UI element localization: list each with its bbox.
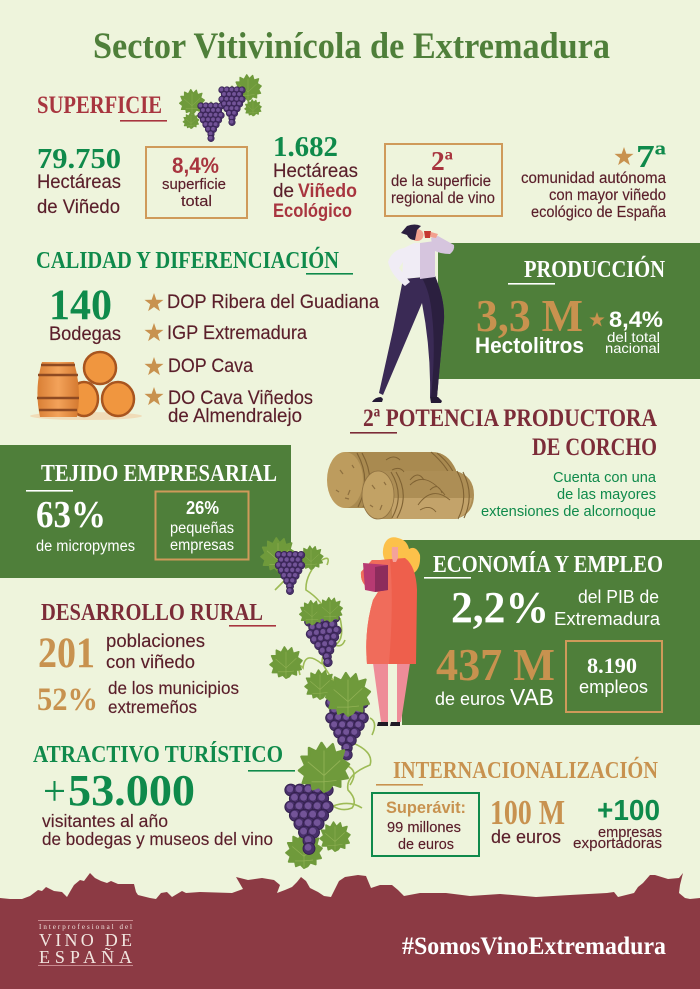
panel: producción background (438, 243, 700, 379)
list: denominaciones de origen: DOP Cava (168, 356, 253, 377)
stat: +53.000 visitantes: de bodegas y museos del vino (42, 829, 273, 849)
panel: producción text (475, 256, 666, 358)
illustration: grapevine (261, 538, 375, 868)
panel: internacionalización (372, 757, 662, 856)
logo: interprofesional del vino de España: VINO DE (39, 930, 132, 950)
icon: star (589, 312, 605, 326)
stat: 1.682 hectáreas ecológico: 1.682 (273, 131, 338, 163)
callout: 2ª superficie regional: regional de vino (391, 190, 495, 207)
heading: atractivo turístico: ATRACTIVO TURÍSTICO (33, 742, 283, 768)
callout: 8.190 empleos: 8.190 (587, 653, 637, 678)
stat: 7ª comunidad autónoma: comunidad autónoma (521, 170, 666, 187)
stat: 1.682 hectáreas ecológico: Viñedo (298, 181, 357, 202)
logo: interprofesional del vino de España (38, 920, 133, 967)
list: denominaciones de origen: IGP Extremadura (167, 323, 307, 344)
stat: 201 poblaciones: 201 (38, 630, 95, 677)
stat: 52% municipios: 52% (37, 682, 98, 718)
stat: 1.682 hectáreas ecológico: de (273, 181, 294, 202)
list: denominaciones de origen (144, 292, 379, 427)
stat: +53.000 visitantes (42, 766, 273, 849)
stat: 140 bodegas: 140 (49, 282, 112, 329)
list: denominaciones de origen: DO Cava Viñedos (168, 388, 313, 409)
stat: 1.682 hectáreas ecológico (273, 131, 358, 222)
heading: 2ª potencia productora de corcho: 2ª POTENCIA PRODUCTORA (363, 405, 657, 432)
stat: +53.000 visitantes: 53.000 (68, 766, 195, 815)
callout: superávit 99 millones (372, 793, 479, 856)
stat: 201 poblaciones: poblaciones (106, 631, 205, 651)
list: denominaciones de origen: de Almendralejo (168, 406, 302, 427)
stat: 437 M de euros VAB (435, 639, 555, 710)
callout: 26% pequeñas empresas: pequeñas (170, 520, 234, 537)
heading: superficie: SUPERFICIE (37, 92, 162, 119)
callout: 8,4% superficie total (146, 147, 247, 218)
vine leaf (270, 647, 302, 678)
stat: 1.682 hectáreas ecológico: Ecológico (273, 201, 352, 222)
heading: producción: PRODUCCIÓN (524, 256, 666, 283)
panel: desarrollo rural (37, 600, 276, 718)
panel: superficie (37, 75, 666, 222)
heading: desarrollo rural: DESARROLLO RURAL (41, 600, 263, 626)
panel: tejido empresarial background (0, 445, 291, 578)
grape cluster 3 (305, 670, 370, 760)
heading: 2ª potencia productora de corcho: DE CORCHO (532, 434, 657, 461)
stat: 201 poblaciones: con viñedo (106, 652, 195, 672)
stat: 79.750 hectáreas: de Viñedo (37, 197, 120, 218)
icon: grapes (180, 75, 261, 142)
callout: 8,4% superficie total: total (181, 193, 212, 210)
hashtag: #SomosVinoExtremadura (402, 933, 666, 960)
callout: 2ª superficie regional: 2ª (431, 146, 453, 176)
stat: 437 M de euros VAB: de euros (435, 689, 505, 709)
icon: barrels (30, 352, 142, 420)
text: extensiones de alcornoque: Cuenta con una (553, 469, 657, 486)
stat: 63% de micropymes: de micropymes (36, 538, 135, 555)
callout: 2ª superficie regional (385, 144, 502, 216)
stat: +100 empresas exportadoras: exportadoras (573, 835, 662, 852)
stat: 2,2% del PIB: Extremadura (554, 609, 661, 629)
heading: calidad y diferenciación: CALIDAD Y DIFERENCIACIÓN (36, 247, 340, 274)
heading: tejido empresarial: TEJIDO EMPRESARIAL (41, 461, 277, 487)
stat: 437 M de euros VAB: 437 M (436, 639, 555, 690)
stat: 8,4% del total nacional: del total (607, 329, 660, 345)
stat: 3,3 M hectolitros: 3,3 M (476, 290, 583, 341)
stat: 52% municipios: de los municipios (108, 678, 239, 698)
stat: 201 poblaciones (38, 630, 205, 677)
callout: 2ª superficie regional: de la superficie (391, 173, 491, 190)
logo: interprofesional del vino de España: ESPAÑA (39, 946, 132, 967)
stat: 8,4% del total nacional (605, 307, 663, 356)
stat: 100 M de euros: de euros (491, 827, 561, 847)
stat: 52% municipios (37, 678, 239, 718)
callout: 26% pequeñas empresas: empresas (170, 537, 234, 554)
stat: +53.000 visitantes: + (43, 769, 66, 815)
callout: superávit 99 millones: de euros (398, 836, 454, 853)
stat: 8,4% del total nacional: 8,4% (609, 307, 663, 332)
stat: 2,2% del PIB: 2,2% (451, 583, 549, 632)
stat: 63% de micropymes (36, 494, 135, 555)
list: denominaciones de origen: DOP Ribera del Guadiana (167, 292, 379, 313)
callout: 26% pequeñas empresas: 26% (186, 498, 219, 518)
stat: 7ª comunidad autónoma: 7ª (636, 138, 666, 174)
stat: 140 bodegas: Bodegas (49, 324, 121, 345)
grape cluster 4 (285, 743, 350, 868)
text: extensiones de alcornoque: extensiones de alcornoque (481, 503, 656, 520)
stat: 52% municipios: extremeños (108, 697, 197, 717)
panel: tejido empresarial text (26, 461, 277, 560)
grape cluster 1 (261, 538, 323, 595)
text: extensiones de alcornoque (481, 469, 657, 520)
callout: 26% pequeñas empresas (156, 492, 248, 560)
stat: +53.000 visitantes: visitantes al año (42, 811, 168, 831)
stat: 79.750 hectáreas (37, 144, 121, 218)
stat: +100 empresas exportadoras: +100 (597, 795, 660, 827)
callout: 8,4% superficie total: superficie (162, 176, 226, 193)
logo: interprofesional del vino de España: Interprofesional del (39, 923, 132, 931)
callout: 8.190 empleos (566, 641, 662, 712)
footer band with vine silhouette (0, 873, 700, 989)
stat: 79.750 hectáreas: 79.750 (37, 144, 121, 175)
stat: 100 M de euros (490, 793, 565, 847)
heading: economía y empleo: ECONOMÍA Y EMPLEO (433, 552, 663, 578)
callout: superávit 99 millones: Superávit: (386, 798, 466, 817)
stat: 2,2% del PIB: del PIB de (578, 587, 659, 607)
stat: 63% de micropymes: 63% (36, 494, 106, 536)
figure: woman reading (361, 537, 420, 726)
stat: 7ª comunidad autónoma (521, 138, 666, 221)
stat: +100 empresas exportadoras (573, 795, 662, 852)
text: extensiones de alcornoque: de las mayores (557, 486, 656, 503)
title: Sector Vitivinícola de Extremadura (93, 26, 610, 67)
figure: man drinking wine (372, 224, 454, 403)
stat: 7ª comunidad autónoma: ecológico de España (531, 204, 666, 221)
heading: internacionalización: INTERNACIONALIZACIÓN (393, 757, 659, 784)
callout: superávit 99 millones: 99 millones (387, 819, 461, 836)
stat: 8,4% del total nacional: nacional (605, 340, 660, 356)
callout: 8,4% superficie total: 8,4% (172, 153, 219, 178)
stat: +100 empresas exportadoras: empresas (598, 824, 662, 841)
icon: corks (327, 452, 474, 519)
stat: 437 M de euros VAB: VAB (510, 684, 554, 710)
panel: calidad y diferenciación (30, 247, 379, 427)
heading: 2ª potencia productora de corcho (350, 405, 657, 461)
callout: 8.190 empleos: empleos (579, 677, 648, 697)
stat: 1.682 hectáreas ecológico: Hectáreas (273, 161, 358, 182)
stat: 7ª comunidad autónoma: con mayor viñedo (549, 187, 666, 204)
stat: 2,2% del PIB (451, 583, 661, 632)
stat: 140 bodegas (49, 282, 121, 345)
stat: 3,3 M hectolitros: Hectolitros (475, 333, 584, 358)
stat: 79.750 hectáreas: Hectáreas (37, 172, 121, 193)
grape cluster 2 (300, 598, 346, 669)
panel: corcho (327, 405, 657, 520)
stat: 100 M de euros: 100 M (490, 793, 565, 832)
panel: economía y empleo text (424, 552, 663, 712)
panel: atractivo turístico (33, 742, 295, 849)
panel: economía y empleo background (402, 540, 700, 725)
